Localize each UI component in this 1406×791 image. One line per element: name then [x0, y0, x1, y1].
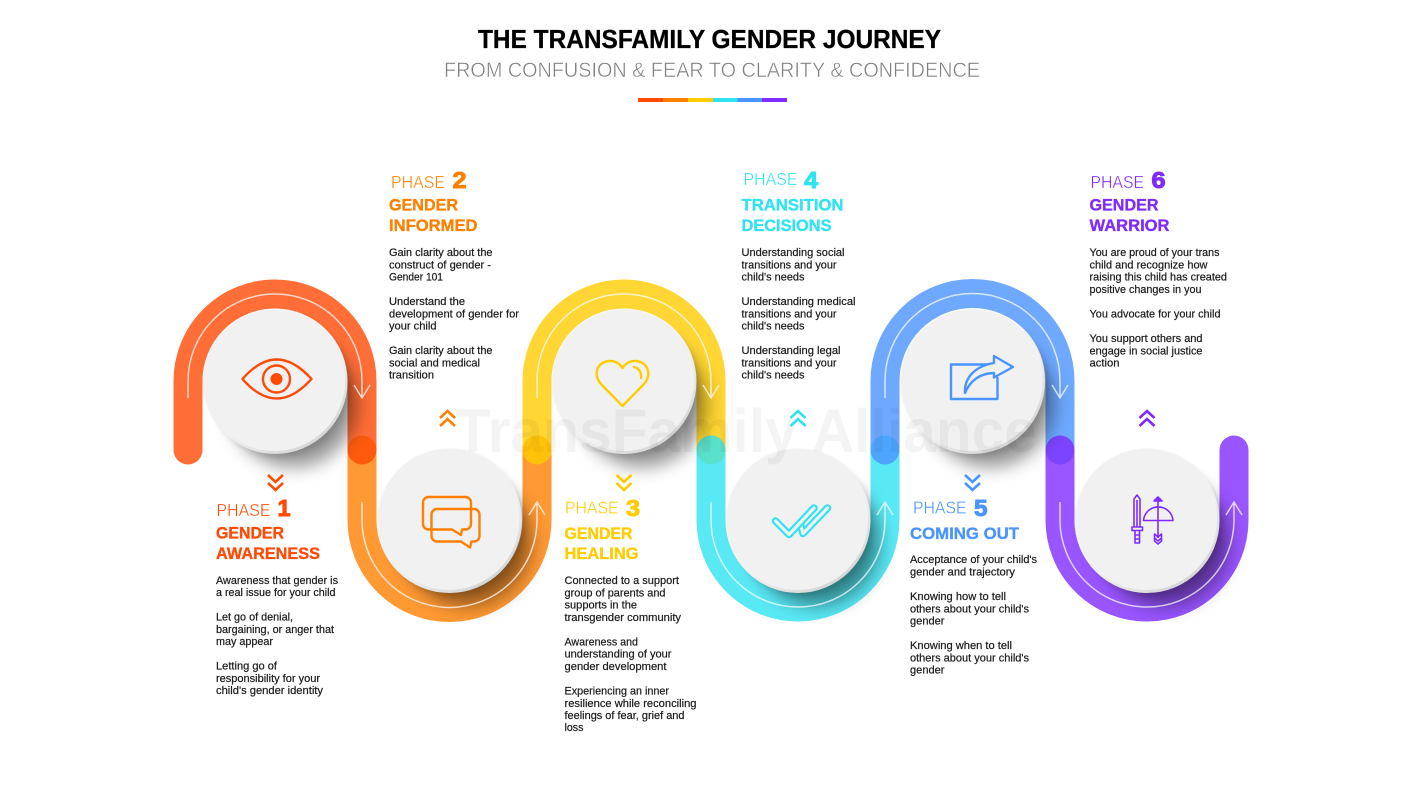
- text: phase 2 details: social and medical: [389, 358, 480, 370]
- icon: chevrons up phase 2: [440, 411, 455, 426]
- band: phase 6: [1060, 450, 1234, 607]
- text: phase 4 details: Understanding medical: [742, 296, 856, 308]
- phase label 4: 4: [804, 167, 818, 193]
- text: phase 5 details: gender: [910, 664, 945, 676]
- phase label 1: 1: [278, 495, 291, 521]
- rainbow divider: [638, 98, 787, 102]
- phase label 6: 6: [1152, 167, 1166, 193]
- panel: phase 1: [216, 495, 338, 697]
- panel: phase 6: [1090, 167, 1227, 370]
- phase label 5: PHASE: [913, 498, 966, 518]
- phase label 5: 5: [974, 495, 988, 521]
- phase label 2: PHASE: [391, 172, 445, 192]
- text: phase 2 details: Gain clarity about the: [389, 247, 492, 259]
- circle: phase 4: [726, 448, 870, 593]
- phase label 3: [565, 495, 640, 521]
- phase label 1: [216, 495, 291, 521]
- circle: phase 3: [552, 309, 696, 454]
- heading: gender healing: HEALING: [564, 544, 638, 563]
- text: phase 1 details: Awareness that gender is: [216, 575, 338, 587]
- text: phase 4 details: Understanding social: [742, 247, 844, 259]
- text: phase 4 details: [742, 247, 856, 382]
- heading: gender warrior: WARRIOR: [1090, 216, 1170, 235]
- heading: gender healing: [564, 524, 638, 563]
- circle: phase 1: [202, 309, 348, 454]
- text: phase 4 details: transitions and your: [742, 308, 837, 320]
- text: phase 4 details: child's needs: [742, 272, 805, 284]
- text: phase 5 details: [910, 554, 1037, 676]
- text: phase 5 details: gender and trajectory: [910, 566, 1015, 578]
- heading: gender awareness: [216, 524, 320, 563]
- text: phase 2 details: Gender 101: [389, 272, 443, 284]
- panel: phase 3: [564, 495, 696, 734]
- text: phase 3 details: transgender community: [564, 612, 681, 624]
- icon: chevrons down phase 5: [965, 475, 980, 490]
- band: phase 4: [711, 450, 885, 607]
- text: phase 3 details: supports in the: [564, 600, 637, 612]
- text: phase 6 details: action: [1090, 358, 1120, 370]
- band: phase 5: [885, 294, 1060, 450]
- band: phase 2: [362, 450, 537, 608]
- text: phase 6 details: You support others and: [1090, 333, 1202, 345]
- band: phase 1: [188, 294, 362, 450]
- icon: double check: [776, 508, 828, 534]
- heading: transition decisions: DECISIONS: [742, 216, 832, 235]
- text: phase 3 details: loss: [564, 722, 584, 734]
- text: phase 1 details: Letting go of: [216, 661, 278, 673]
- text: phase 2 details: development of gender for: [389, 308, 519, 320]
- phase label 3: PHASE: [565, 498, 618, 518]
- text: phase 2 details: Understand the: [389, 296, 465, 308]
- text: phase 3 details: group of parents and: [564, 588, 666, 600]
- heading: transition decisions: [742, 196, 844, 235]
- winding ribbon path: [188, 294, 1234, 608]
- text: phase 6 details: You are proud of your trans: [1090, 247, 1220, 259]
- text: phase 1 details: [216, 575, 338, 697]
- phase label 1: PHASE: [216, 500, 270, 520]
- icon: chevrons up phase 4: [790, 411, 806, 426]
- text: phase 2 details: construct of gender -: [389, 260, 491, 272]
- heading: gender awareness: GENDER: [216, 524, 284, 542]
- text: phase 1 details: responsibility for your: [216, 673, 320, 685]
- band: phase 3: [537, 294, 711, 450]
- text: phase 1 details: child's gender identity: [216, 685, 323, 697]
- phase label 2: [391, 167, 466, 193]
- circle: phase 6: [1074, 448, 1220, 593]
- circle: phase 2: [377, 448, 522, 593]
- text: phase 6 details: raising this child has created: [1090, 272, 1227, 284]
- icon: eye: [242, 360, 312, 398]
- subtitle: FROM CONFUSION & FEAR TO CLARITY & CONFIDENCE: [444, 59, 980, 82]
- text: phase 2 details: Gain clarity about the: [389, 345, 492, 357]
- text: phase 6 details: child and recognize how: [1090, 260, 1208, 272]
- heading: coming out: COMING OUT: [910, 524, 1020, 543]
- text: phase 4 details: child's needs: [742, 370, 805, 382]
- phase label 4: [744, 167, 818, 193]
- text: phase 5 details: gender: [910, 616, 945, 628]
- text: phase 5 details: Knowing when to tell: [910, 640, 1012, 652]
- text: phase 6 details: engage in social justice: [1090, 346, 1202, 358]
- phase label 4: PHASE: [744, 169, 798, 189]
- circle shadows: [208, 315, 1229, 606]
- chevrons: [268, 411, 1154, 490]
- heading: gender warrior: [1090, 196, 1170, 235]
- icon: chevrons down phase 1: [268, 475, 283, 490]
- heading: gender informed: GENDER: [389, 196, 458, 215]
- panel: phase 2: [389, 167, 519, 382]
- flow lines with arrows: [188, 294, 1242, 608]
- heading: gender healing: GENDER: [564, 524, 632, 543]
- text: phase 5 details: Knowing how to tell: [910, 591, 1006, 603]
- text: phase 3 details: resilience while reconciling: [564, 698, 696, 710]
- text: phase 1 details: bargaining, or anger that: [216, 624, 335, 636]
- text: phase 3 details: Experiencing an inner: [564, 686, 669, 698]
- text: phase 4 details: Understanding legal: [742, 345, 840, 357]
- heading: transition decisions: TRANSITION: [742, 196, 844, 215]
- phase label 3: 3: [626, 495, 640, 521]
- phase label 6: [1090, 167, 1166, 193]
- icon: sword and bow: [1132, 495, 1173, 544]
- text: phase 3 details: feelings of fear, grief and: [564, 710, 684, 722]
- title: THE TRANSFAMILY GENDER JOURNEY: [478, 26, 941, 54]
- text: phase 2 details: transition: [389, 370, 434, 382]
- text: phase 3 details: Awareness and: [564, 636, 638, 648]
- icon: share arrow: [951, 356, 1013, 399]
- text: phase 3 details: Connected to a support: [564, 575, 680, 587]
- text: phase 2 details: [389, 247, 519, 382]
- text: phase 6 details: You advocate for your child: [1090, 308, 1220, 320]
- watermark: TransFamily Alliance: [455, 397, 1037, 465]
- text: phase 5 details: Acceptance of your child's: [910, 554, 1037, 566]
- text: phase 4 details: transitions and your: [742, 358, 837, 370]
- heading: gender warrior: GENDER: [1090, 196, 1158, 215]
- phase label 2: 2: [452, 167, 466, 193]
- text: phase 2 details: your child: [389, 320, 436, 332]
- text: phase 5 details: others about your child's: [910, 652, 1029, 664]
- heading: gender informed: [389, 196, 478, 235]
- text: phase 3 details: gender development: [564, 661, 667, 673]
- text: phase 4 details: transitions and your: [742, 260, 837, 272]
- phase label 6: PHASE: [1090, 172, 1144, 192]
- text: phase 1 details: Let go of denial,: [216, 612, 293, 624]
- icon: chat bubbles: [423, 497, 480, 548]
- phase label 5: [913, 495, 988, 521]
- text: phase 1 details: may appear: [216, 636, 273, 648]
- text: phase 6 details: positive changes in you: [1090, 284, 1202, 296]
- text: phase 3 details: understanding of your: [564, 648, 672, 660]
- text: phase 3 details: [564, 575, 696, 734]
- text: phase 1 details: a real issue for your child: [216, 587, 336, 599]
- heading: gender informed: INFORMED: [389, 216, 478, 235]
- panel: phase 4: [742, 167, 856, 382]
- text: phase 6 details: [1090, 247, 1227, 370]
- icon: chevrons up phase 6: [1140, 411, 1154, 426]
- circle: phase 5: [900, 309, 1045, 454]
- panel: phase 5: [910, 495, 1037, 676]
- heading: gender awareness: AWARENESS: [216, 544, 320, 563]
- icon: heart: [597, 361, 648, 406]
- text: phase 4 details: child's needs: [742, 320, 805, 332]
- icon: chevrons down phase 3: [616, 475, 632, 490]
- text: phase 5 details: others about your child's: [910, 604, 1029, 616]
